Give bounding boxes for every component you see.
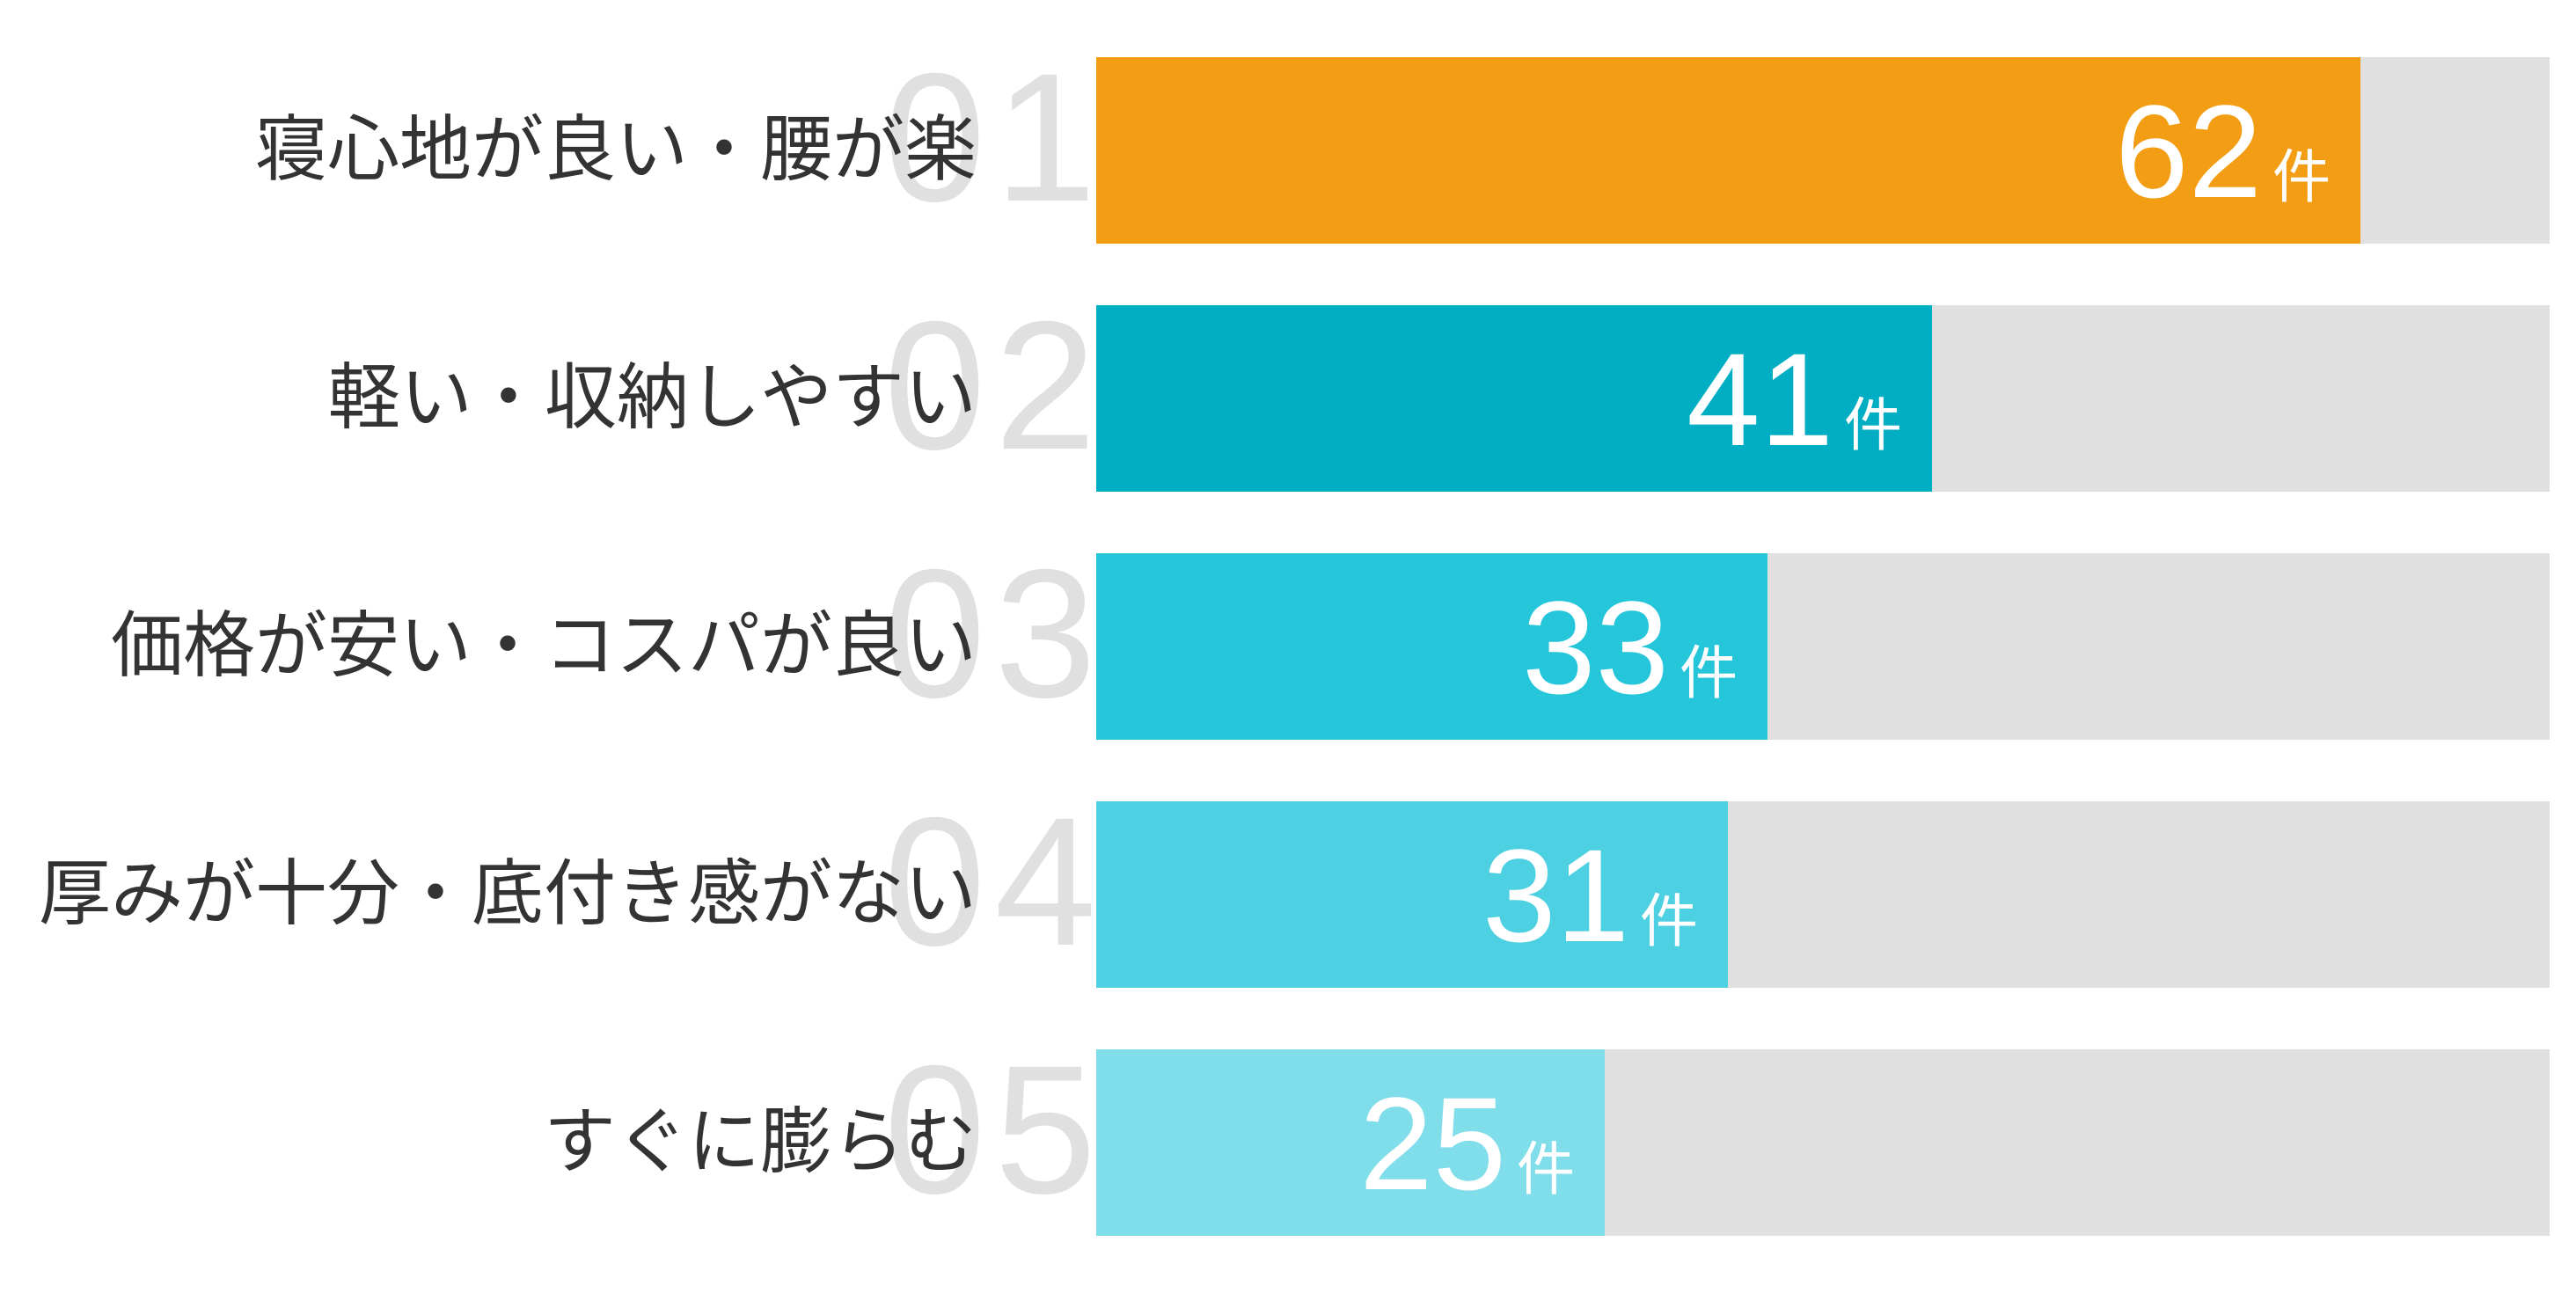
bar 3 (1096, 553, 2550, 740)
rank number 04: 04 (884, 780, 1105, 984)
bar 2: 41件 (1687, 325, 1902, 473)
label 3: 価格が安い・コスパが良い (111, 606, 977, 686)
rank number 01: 01 (884, 36, 1105, 240)
bar 3: 33件 (1522, 573, 1738, 721)
bar 2 (1096, 305, 2550, 492)
bar 4: 31件 (1482, 822, 1698, 969)
rank number 02: 02 (884, 284, 1105, 488)
label 4: 厚みが十分・底付き感がない (39, 854, 977, 934)
rank number 03: 03 (884, 532, 1105, 736)
bar 1 (1096, 57, 2550, 244)
row 1 (255, 36, 2550, 244)
bar 5: 25件 (1359, 1070, 1575, 1217)
bar 5 (1096, 1049, 2550, 1236)
row 4 (39, 780, 2550, 988)
row 2 (328, 284, 2550, 492)
row 3 (111, 532, 2550, 740)
rank number 05: 05 (884, 1028, 1105, 1232)
label 5: すぐに膨らむ (544, 1102, 977, 1182)
label 2: 軽い・収納しやすい (328, 358, 977, 438)
bar 4 (1096, 801, 2550, 988)
label 1: 寝心地が良い・腰が楽 (255, 110, 977, 190)
bar 1: 62件 (2115, 77, 2331, 225)
row 5 (544, 1028, 2550, 1236)
